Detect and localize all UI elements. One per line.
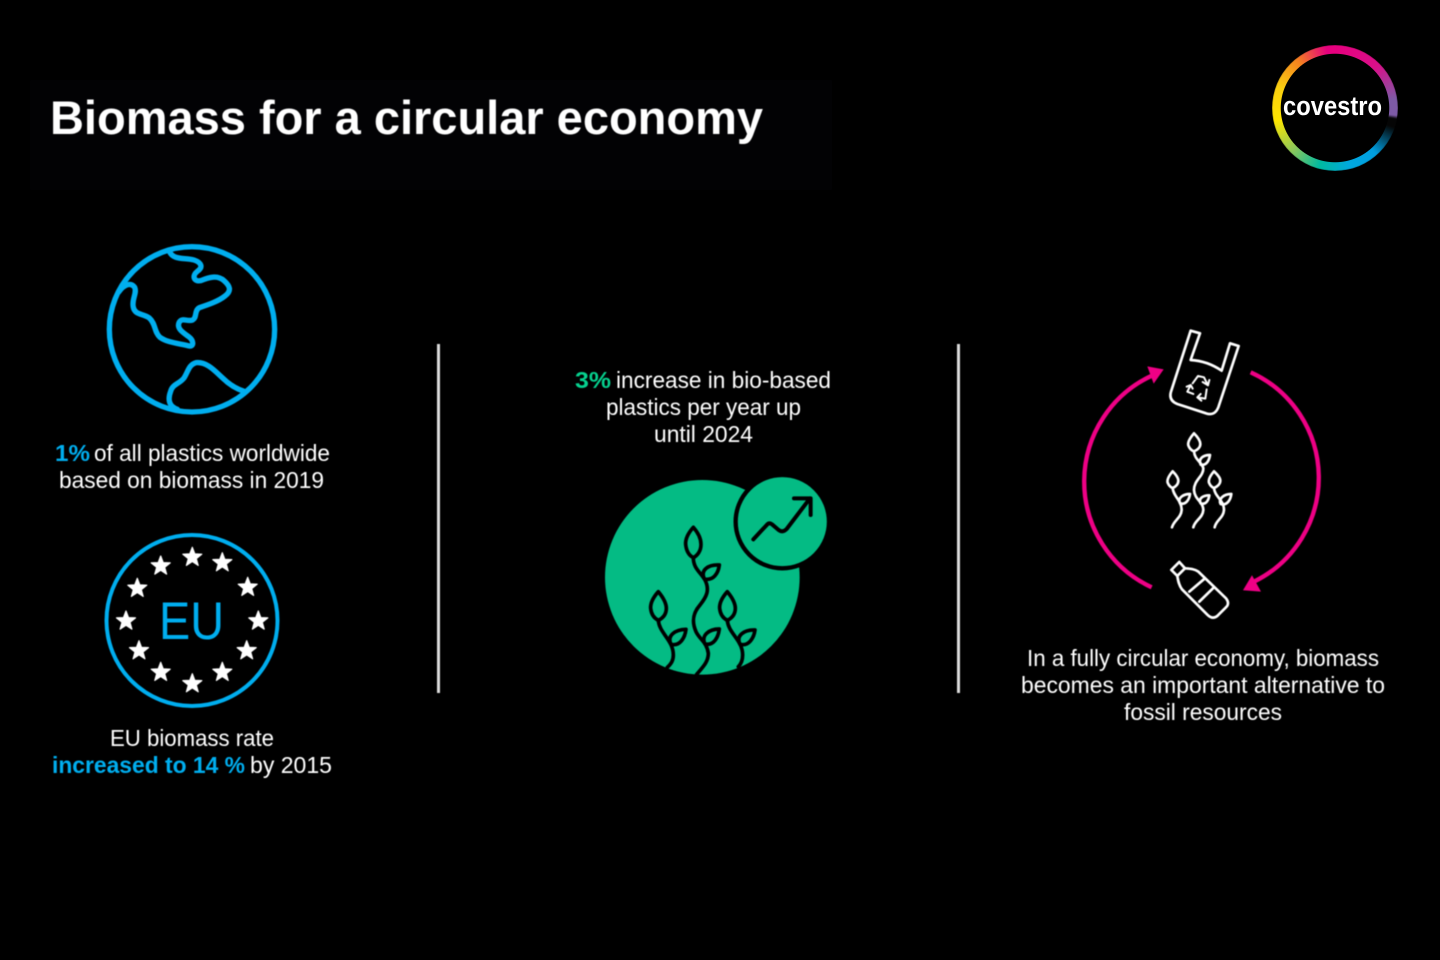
icon: green plant circle with growth chart	[605, 475, 829, 675]
icon: globe	[109, 247, 275, 412]
panel: worldwide and EU biomass	[52, 247, 332, 778]
text: fully circular economy	[1021, 645, 1385, 725]
text: fully circular economy: In a fully circular economy, biomass	[1027, 645, 1379, 671]
text: EU biomass rate: by 2015	[250, 752, 332, 778]
text: 1% of all plastics: 1%	[55, 440, 90, 466]
text: EU biomass rate: EU biomass rate	[110, 725, 274, 751]
text: 1% of all plastics	[55, 440, 330, 493]
text: fully circular economy: fossil resources	[1124, 699, 1282, 725]
text: 3% increase: 3%	[575, 367, 611, 393]
text: EU biomass rate: increased to 14 %	[52, 752, 245, 778]
text: 3% increase: plastics per year up	[606, 394, 801, 420]
panel: circular economy	[1021, 331, 1385, 725]
title: Biomass for a circular economy	[50, 91, 763, 144]
diagram: circular loop	[1084, 331, 1319, 618]
header panel	[30, 80, 832, 190]
text: fully circular economy: becomes an important alternative to	[1021, 672, 1385, 698]
text: 3% increase: until 2024	[654, 421, 753, 447]
logo: covestro: covestro	[1283, 91, 1382, 121]
icon: recycling bag	[1170, 331, 1239, 414]
text: 1% of all plastics: of all plastics worldwide	[94, 440, 330, 466]
arrow: right arc	[1243, 372, 1319, 592]
text: 1% of all plastics: based on biomass in 2019	[59, 467, 324, 493]
panel: bio-based plastics growth	[575, 367, 831, 675]
icon: EU stars circle	[106, 535, 278, 706]
icon: EU stars circle: EU	[159, 592, 224, 651]
icon: plant sprouts	[1168, 433, 1231, 527]
arrow: left arc	[1084, 366, 1164, 587]
text: 3% increase	[575, 367, 831, 447]
logo: covestro	[1272, 45, 1398, 171]
text: EU biomass rate	[52, 725, 332, 778]
text: 3% increase: increase in bio-based	[616, 367, 831, 393]
icon: plastic bottle	[1171, 562, 1228, 618]
